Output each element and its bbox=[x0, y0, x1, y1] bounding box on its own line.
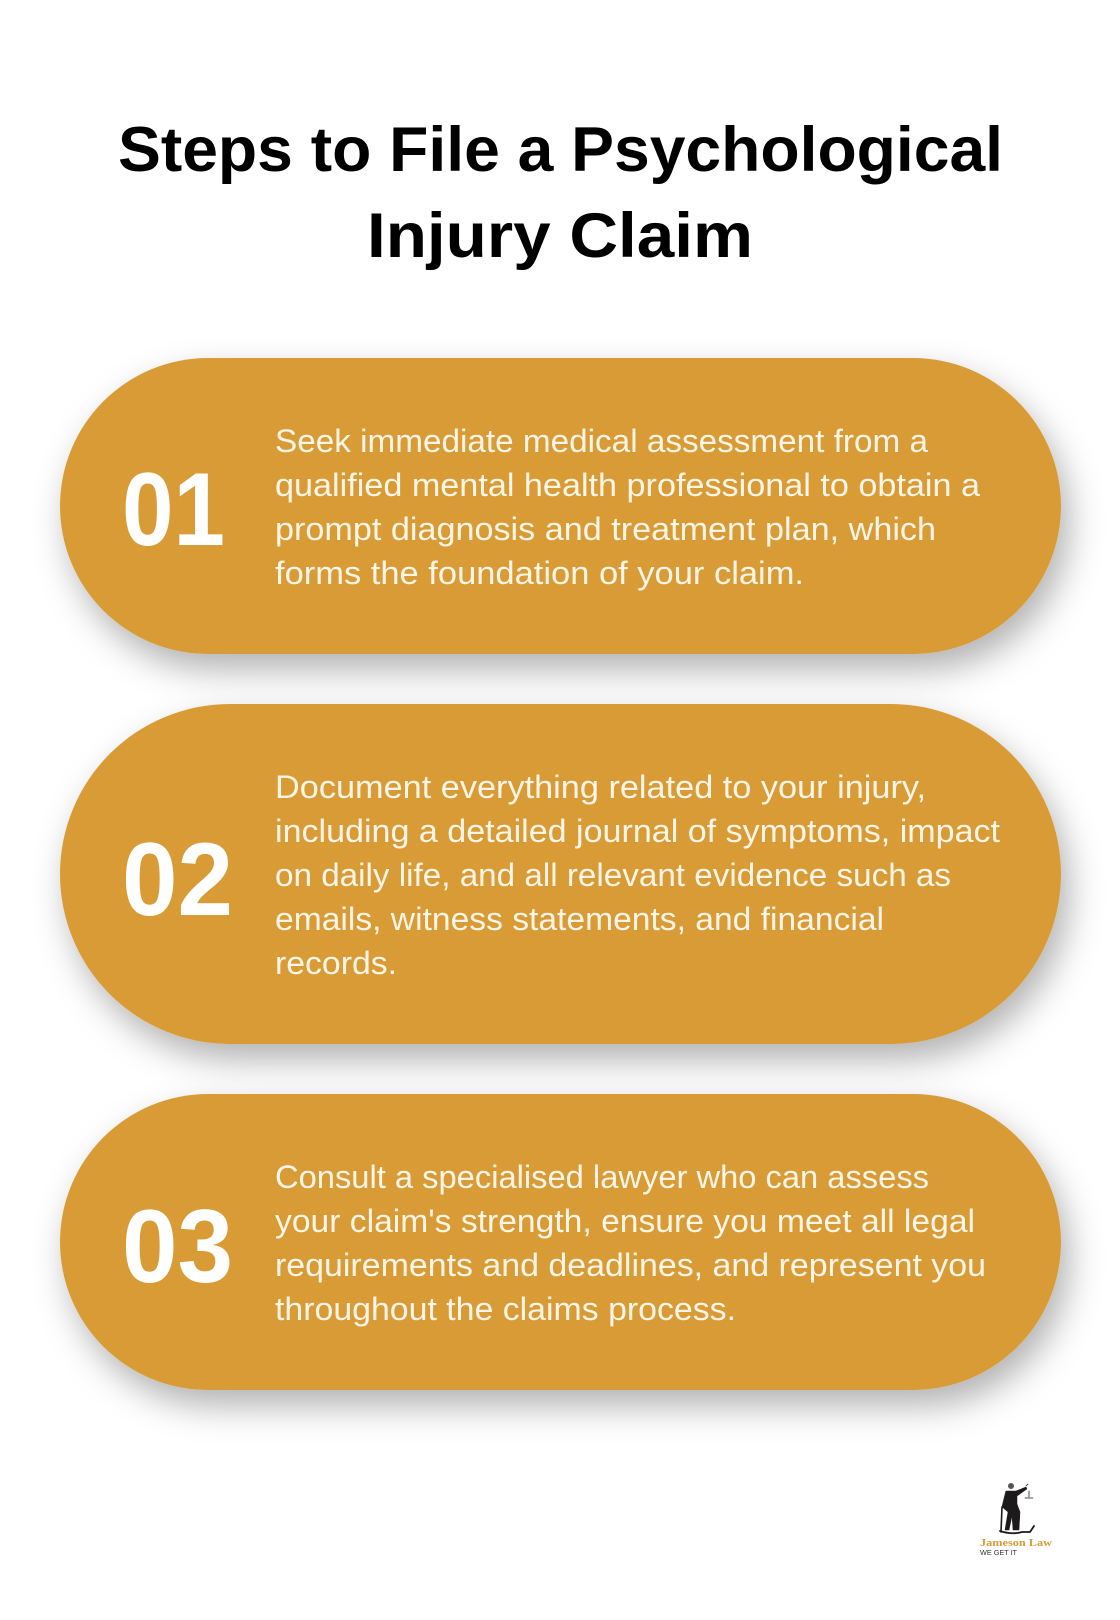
step 2 description: emails, witness statements, and financial bbox=[275, 901, 884, 937]
step 3 number: 03 bbox=[122, 1189, 233, 1305]
step 3 description: your claim's strength, ensure you meet all legal bbox=[275, 1203, 975, 1239]
panel: step 2 bbox=[60, 704, 1061, 1044]
icon: lady justice bbox=[1000, 1483, 1034, 1533]
step 3 description: requirements and deadlines, and represent you bbox=[275, 1247, 986, 1283]
step 3 description bbox=[275, 1159, 986, 1327]
title: Injury Claim bbox=[367, 201, 753, 271]
step 3 description: throughout the claims process. bbox=[275, 1291, 736, 1327]
step 1 description: forms the foundation of your claim. bbox=[275, 555, 804, 591]
step 2 description: records. bbox=[275, 945, 397, 981]
logo wordmark: Jameson Law bbox=[980, 1538, 1053, 1549]
step 1 description: Seek immediate medical assessment from a bbox=[275, 423, 928, 459]
step 1 pill background bbox=[60, 358, 1061, 654]
panel: step 1 bbox=[60, 358, 1061, 654]
logo: Jameson Law bbox=[980, 1483, 1053, 1557]
step 1 number: 01 bbox=[122, 452, 225, 568]
step 2 pill background bbox=[60, 704, 1061, 1044]
step 1 description: qualified mental health professional to obtain a bbox=[275, 467, 980, 503]
title bbox=[118, 115, 1003, 271]
step 2 description bbox=[275, 769, 1000, 981]
step 2 description: on daily life, and all relevant evidence such as bbox=[275, 857, 951, 893]
title: Steps to File a Psychological bbox=[118, 115, 1003, 185]
step 1 description: prompt diagnosis and treatment plan, which bbox=[275, 511, 936, 547]
step 3 pill background bbox=[60, 1094, 1061, 1390]
step 2 description: including a detailed journal of symptoms, impact bbox=[275, 813, 1000, 849]
step 3 description: Consult a specialised lawyer who can assess bbox=[275, 1159, 929, 1195]
step 2 number: 02 bbox=[122, 822, 233, 938]
panel: step 3 bbox=[60, 1094, 1061, 1390]
logo tagline: WE GET IT bbox=[980, 1548, 1017, 1557]
step 1 description bbox=[275, 423, 980, 591]
step 2 description: Document everything related to your injury, bbox=[275, 769, 926, 805]
